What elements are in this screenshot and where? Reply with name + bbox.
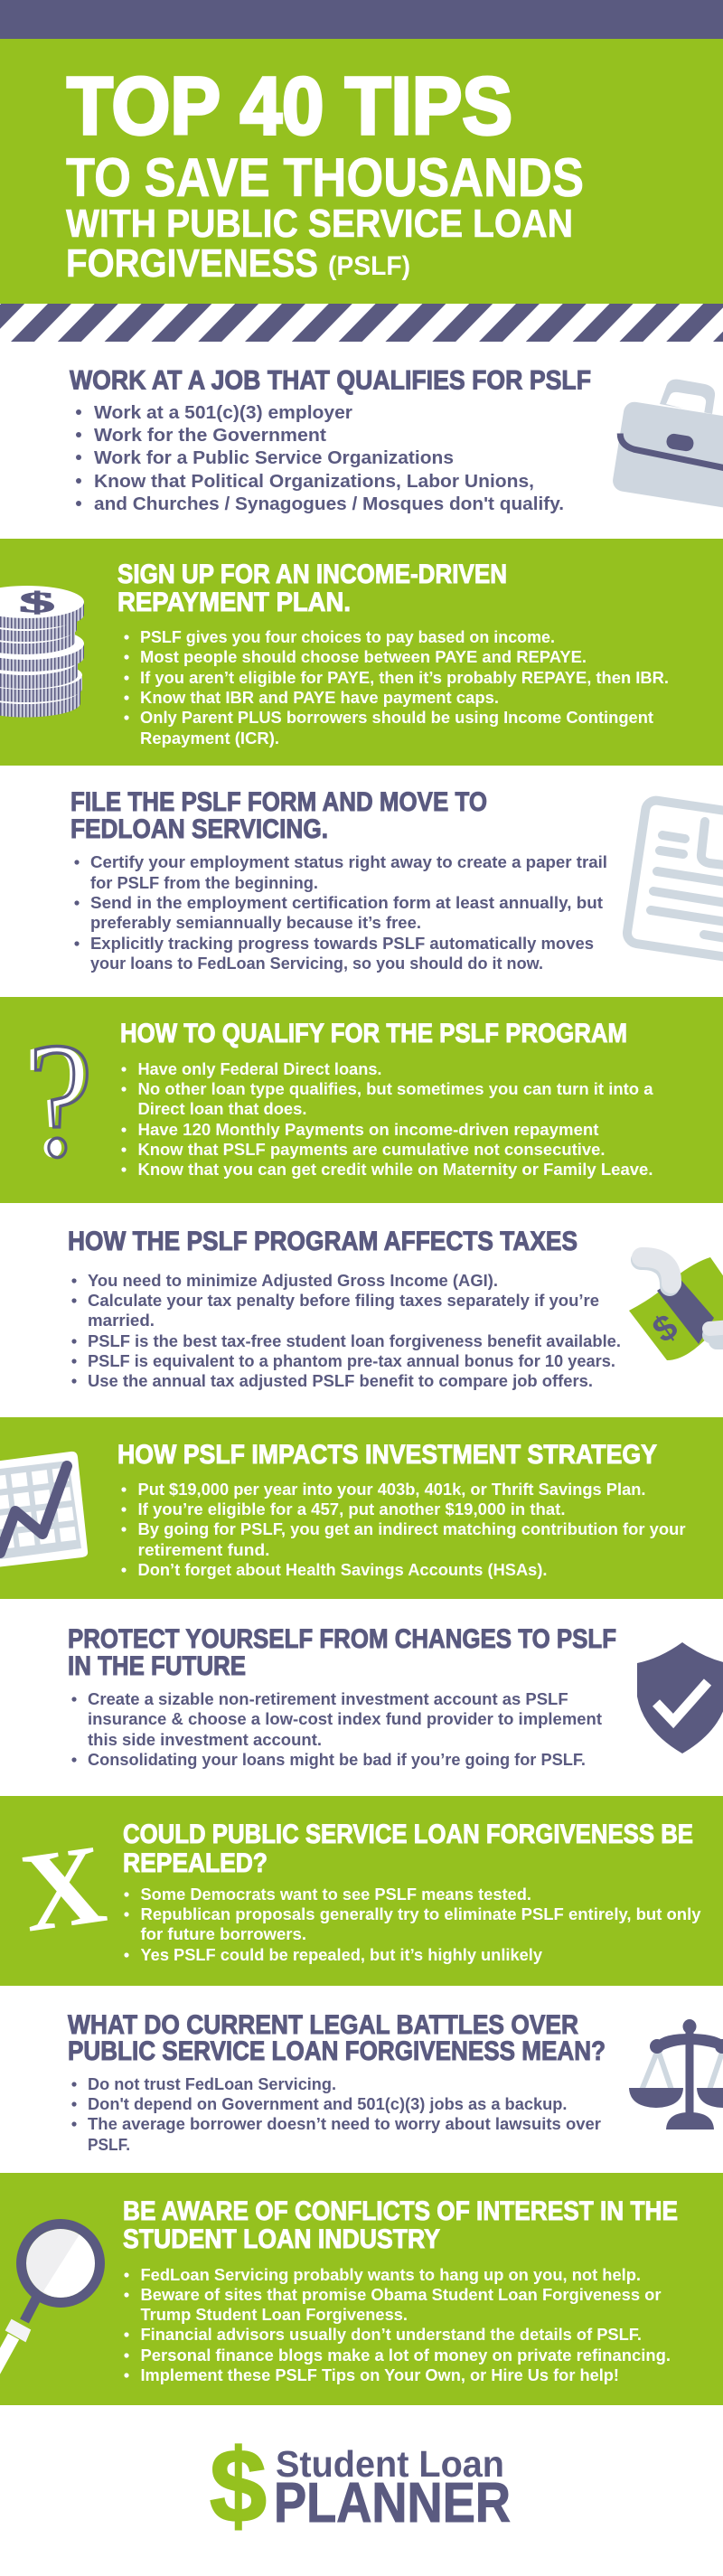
- panel: investment strategy: [0, 1417, 723, 1599]
- heading: REPEALED?: [123, 1848, 268, 1878]
- heading: WHAT DO CURRENT LEGAL BATTLES OVER: [68, 2010, 578, 2040]
- subtitle: with public service loan forgiveness: WITH PUBLIC SERVICE LOAN: [66, 202, 573, 246]
- bullet list: your loans to FedLoan Servicing, so you should do it now.: [90, 954, 543, 973]
- icon: line chart: [0, 1452, 88, 1570]
- title: TOP 40 TIPS: [67, 61, 512, 152]
- bullet list: [121, 1059, 653, 1179]
- bullet list: and Churches / Synagogues / Mosques don't qualify.: [94, 494, 564, 514]
- bullet list: Know that PSLF payments are cumulative not consecutive.: [137, 1140, 606, 1159]
- bullet list: Don't depend on Government and 501(c)(3) jobs as a backup.: [88, 2094, 568, 2113]
- panel: conflicts of interest: [0, 2173, 723, 2405]
- bullet list: If you’re eligible for a 457, put another $19,000 in that.: [137, 1500, 566, 1518]
- bullet list: No other loan type qualifies, but sometimes you can turn it into a: [137, 1079, 653, 1098]
- heading: REPAYMENT PLAN.: [117, 588, 351, 617]
- bullet list: insurance & choose a low-cost index fund provider to implement: [88, 1709, 602, 1728]
- subtitle: with public service loan forgiveness: (PSLF): [328, 251, 410, 281]
- bullet list: Create a sizable non-retirement investment account as PSLF: [88, 1689, 568, 1708]
- panel: income-driven repayment: [0, 539, 723, 766]
- top bar: [0, 0, 723, 39]
- subtitle: with public service loan forgiveness: [66, 202, 573, 286]
- bullet list: Don’t forget about Health Savings Accounts (HSAs).: [137, 1560, 548, 1579]
- bullet list: [71, 2074, 601, 2154]
- icon: shield with check: [637, 1642, 723, 1753]
- bullet list: Know that IBR and PAYE have payment caps.: [140, 688, 499, 707]
- icon: document: [625, 799, 723, 962]
- bullet list: Most people should choose between PAYE and REPAYE.: [140, 647, 587, 666]
- icon: flying money: $: [645, 1307, 685, 1350]
- bullet list: Financial advisors usually don’t understand the details of PSLF.: [141, 2325, 642, 2344]
- bullet list: [121, 1480, 685, 1579]
- bullet list: [76, 402, 564, 514]
- bullet list: Republican proposals generally try to eliminate PSLF entirely, but only: [141, 1904, 701, 1923]
- heading: FEDLOAN SERVICING.: [70, 814, 328, 844]
- bullet list: Repayment (ICR).: [140, 729, 279, 747]
- heading: [70, 787, 487, 844]
- bullet list: Send in the employment certification form at least annually, but: [90, 893, 603, 912]
- panel: legal battles: [68, 2010, 723, 2154]
- diagonal stripe band: [0, 304, 723, 342]
- bullet list: Know that Political Organizations, Labor Unions,: [94, 471, 534, 492]
- icon: magnifying glass: [0, 2223, 104, 2373]
- heading: WORK AT A JOB THAT QUALIFIES FOR PSLF: [70, 365, 591, 396]
- bullet list: retirement fund.: [137, 1540, 269, 1559]
- bullet list: Trump Student Loan Forgiveness.: [141, 2305, 408, 2324]
- bullet list: for PSLF from the beginning.: [90, 873, 318, 892]
- bullet list: for future borrowers.: [141, 1924, 306, 1943]
- bullet list: PSLF gives you four choices to pay based on income.: [140, 627, 555, 646]
- bullet list: Direct loan that does.: [137, 1099, 307, 1118]
- heading: PUBLIC SERVICE LOAN FORGIVENESS MEAN?: [68, 2036, 606, 2066]
- icon: briefcase: [611, 380, 723, 511]
- panel: title banner: [0, 39, 723, 304]
- panel: could PSLF be repealed: [0, 1796, 723, 1986]
- bullet list: Have 120 Monthly Payments on income-driven repayment: [137, 1120, 598, 1139]
- bullet list: Know that you can get credit while on Maternity or Family Leave.: [137, 1160, 653, 1179]
- heading: IN THE FUTURE: [68, 1651, 246, 1681]
- icon: scales: [629, 2019, 723, 2129]
- bullet list: Only Parent PLUS borrowers should be using Income Contingent: [140, 708, 653, 727]
- bullet list: Do not trust FedLoan Servicing.: [88, 2074, 336, 2093]
- bullet list: Personal finance blogs make a lot of money on private refinancing.: [141, 2346, 671, 2364]
- icon: coin stack: [0, 586, 84, 718]
- logo wordmark: [274, 2443, 511, 2534]
- heading: HOW THE PSLF PROGRAM AFFECTS TAXES: [68, 1227, 577, 1256]
- heading: [68, 1624, 616, 1681]
- heading: PROTECT YOURSELF FROM CHANGES TO PSLF: [68, 1624, 616, 1654]
- bullet list: PSLF is equivalent to a phantom pre-tax annual bonus for 10 years.: [88, 1351, 615, 1370]
- logo dollar sign: $: [210, 2429, 267, 2544]
- subtitle: with public service loan forgiveness: FORGIVENESS: [66, 241, 318, 286]
- panel: how to qualify: [0, 997, 723, 1203]
- bullet list: PSLF.: [88, 2135, 130, 2154]
- icon: question mark: ?: [28, 1010, 93, 1191]
- bullet list: [124, 627, 669, 747]
- bullet list: [124, 2265, 671, 2384]
- bullet list: Beware of sites that promise Obama Student Loan Forgiveness or: [141, 2285, 662, 2304]
- bullet list: this side investment account.: [88, 1730, 322, 1749]
- bullet list: [124, 1885, 701, 1964]
- bullet list: PSLF is the best tax-free student loan forgiveness benefit available.: [88, 1331, 621, 1350]
- bullet list: Implement these PSLF Tips on Your Own, or Hire Us for help!: [141, 2365, 619, 2384]
- bullet list: Have only Federal Direct loans.: [137, 1059, 381, 1078]
- bullet list: Certify your employment status right away to create a paper trail: [90, 852, 607, 871]
- bullet list: Some Democrats want to see PSLF means tested.: [141, 1885, 531, 1904]
- heading: HOW PSLF IMPACTS INVESTMENT STRATEGY: [117, 1440, 657, 1470]
- panel: taxes: [68, 1227, 723, 1390]
- bullet list: [71, 1271, 621, 1390]
- heading: FILE THE PSLF FORM AND MOVE TO: [70, 787, 487, 817]
- heading: [123, 2196, 678, 2254]
- bullet list: By going for PSLF, you get an indirect matching contribution for your: [137, 1519, 685, 1538]
- bullet list: Work for a Public Service Organizations: [94, 447, 454, 468]
- bullet list: Consolidating your loans might be bad if you’re going for PSLF.: [88, 1750, 586, 1769]
- bullet list: If you aren’t eligible for PAYE, then it’s probably REPAYE, then IBR.: [140, 668, 669, 687]
- heading: STUDENT LOAN INDUSTRY: [123, 2224, 440, 2254]
- bullet list: Use the annual tax adjusted PSLF benefit to compare job offers.: [88, 1371, 593, 1390]
- icon: flying money: [629, 1257, 723, 1360]
- logo: Student Loan Planner: [210, 2429, 511, 2544]
- heading: [123, 1819, 693, 1878]
- bullet list: married.: [88, 1311, 155, 1330]
- bullet list: You need to minimize Adjusted Gross Income (AGI).: [88, 1271, 498, 1290]
- bullet list: [71, 1689, 602, 1769]
- subtitle line: TO SAVE THOUSANDS: [66, 147, 584, 208]
- logo wordmark: Student Loan: [276, 2443, 504, 2485]
- logo wordmark: PLANNER: [274, 2472, 511, 2534]
- panel: work at a qualifying job: [70, 365, 723, 514]
- bullet list: Calculate your tax penalty before filing taxes separately if you’re: [88, 1291, 599, 1310]
- bullet list: [74, 852, 607, 973]
- icon: coin stack: $: [19, 586, 55, 618]
- bullet list: Work at a 501(c)(3) employer: [94, 402, 352, 423]
- bullet list: FedLoan Servicing probably wants to hang up on you, not help.: [141, 2265, 641, 2284]
- bullet list: Yes PSLF could be repealed, but it’s highly unlikely: [141, 1945, 543, 1964]
- bullet list: Put $19,000 per year into your 403b, 401k, or Thrift Savings Plan.: [137, 1480, 646, 1499]
- bullet list: The average borrower doesn’t need to worry about lawsuits over: [88, 2114, 601, 2133]
- icon: question mark: ?: [23, 1010, 89, 1191]
- panel: protect yourself: [68, 1624, 723, 1769]
- bullet list: Explicitly tracking progress towards PSLF automatically moves: [90, 934, 594, 953]
- panel: file the PSLF form: [70, 787, 723, 973]
- heading: [68, 2010, 606, 2066]
- heading: HOW TO QUALIFY FOR THE PSLF PROGRAM: [120, 1019, 627, 1048]
- bullet list: preferably semiannually because it’s free.: [90, 913, 421, 932]
- heading: SIGN UP FOR AN INCOME-DRIVEN: [117, 559, 507, 589]
- heading: [117, 559, 507, 617]
- bullet list: Work for the Government: [94, 425, 326, 446]
- icon: X: X: [14, 1821, 112, 1957]
